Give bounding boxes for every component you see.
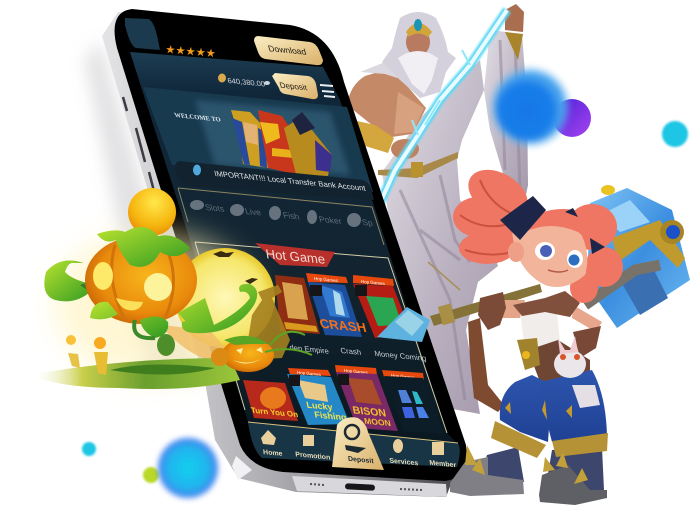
rabbit pouch [554,336,586,378]
zeus crown gem [414,19,422,31]
category panel [178,188,384,245]
small pumpkin leaves [224,336,268,345]
game tile: turn your cat [243,380,299,421]
phone side buttons [123,97,155,195]
balance coin [218,74,226,82]
zeus chest shading [394,92,424,134]
balance amount: 640,380.00 [227,76,266,89]
game tile: money coming [353,275,412,338]
girl right boot shin [545,448,604,492]
girl left glove [478,292,506,330]
game tile: lucky fishing: Lucky [305,400,334,412]
decorative blue orb [490,67,570,147]
girl white top [520,312,560,350]
anubis figure [284,118,332,176]
lightning bolt [380,10,507,203]
category tabs: Sp [361,217,374,228]
zeus sleeve drape [484,30,528,205]
left tail leaf [44,260,95,301]
pumpkin body [85,236,197,324]
small pumpkin [222,338,274,372]
zeus robe hem gold [428,262,460,290]
zeus hand [391,139,419,159]
hot game badge: Hot Game [265,246,326,267]
pant studs [505,400,572,420]
nav labels: Member [429,460,457,469]
pumpkin crease [112,245,174,320]
girl head [500,196,605,287]
nav labels: Home [263,449,283,458]
left eye [535,242,555,260]
grass shadow [110,364,215,375]
promo banner [143,87,373,192]
vine bulb [157,334,175,356]
right boot [539,465,607,505]
mouth [548,270,568,272]
decorative green orb [143,467,159,483]
girl left boot shin [480,447,524,482]
tail stem [80,278,100,296]
right curl leaf [178,284,257,333]
falcon figure [258,110,298,175]
phone bottom edge details [232,456,447,497]
balance eye icon [264,81,270,85]
nav labels [263,449,457,469]
pumpkin leaves [97,227,190,267]
zeus main robe [382,60,498,414]
banner backdrop glow [195,100,350,175]
ear [508,242,524,262]
zeus raised hand [505,4,524,32]
ground [30,358,240,389]
bows [500,196,605,254]
game tile: bison moon: MOON [363,416,392,428]
small pumpkin face [233,347,263,364]
game tile: turn your cat: Turn You On [250,406,299,419]
zeus moustache and beard [398,51,438,94]
yellow ball [128,188,176,236]
hanging vine [134,320,155,338]
moon [175,248,275,348]
zeus character [347,4,528,414]
zeus torso [347,70,426,137]
rabbit charm [572,385,600,408]
category tabs: Slots [204,202,226,214]
phone silver body [102,12,464,497]
small pumpkin side [211,348,229,366]
halloween pumpkin scene [30,188,312,389]
bottom nav bar [248,417,460,470]
right boot spikes [543,452,588,484]
category tabs: Fish [282,210,301,221]
game names row [289,343,427,363]
game tile: crash: CRASH [318,316,368,335]
zeus shoulder robe [360,60,410,82]
pumpkin mouth [116,298,143,310]
game tile: money coming dark [382,370,444,434]
hammer head [587,188,690,328]
game names row: Crash [340,346,362,357]
speaker icon [193,164,201,176]
game tile: bison moon: BISON [352,405,387,420]
menu icon [320,85,335,97]
category tabs [190,200,374,228]
orange sky tint [160,325,235,362]
category tabs: Poker [318,214,343,226]
game tile: money coming: Hop Games [361,279,386,286]
zeus belt buckle [411,162,423,177]
game tile: bison moon [335,365,398,431]
girl hair back curls [453,160,623,303]
girl right pant leg [540,370,607,442]
deposit button [272,73,318,99]
nav labels: Services [389,458,419,467]
nav labels: Promotion [295,451,331,462]
game tile: money coming dark: Hop Games [391,373,416,380]
decorative cyan orb right [662,121,688,147]
hammer gold band [612,220,685,268]
promotion icon [303,435,314,446]
lower leaves [90,302,168,338]
decorative cyan orb small [82,442,96,456]
game tile: crash: Hop Games [314,276,339,283]
notice text: IMPORTANT!!! Local Transfer Bank Account [213,169,367,193]
category tabs: Live [244,206,262,217]
girl hammer [585,185,690,328]
pumpkin left eye [93,262,113,290]
phone screen [130,52,458,467]
deposit icon [345,425,366,453]
services icon [393,439,403,453]
top hair [520,209,594,242]
deposit button: Deposit [278,81,309,92]
zeus gold bracer [354,121,394,153]
deposit tab [332,417,384,470]
nav labels: Deposit [348,456,375,465]
game names row: Money Coming [374,349,427,363]
member icon [432,442,444,455]
girl leather shoulder [513,291,580,317]
girl body [450,291,608,505]
home icon [261,430,276,445]
decorative orb bottom [158,438,218,498]
girl belt and pouch [528,340,590,382]
rating stars: ★★★★★ [165,44,216,60]
game tile: golden empire [275,275,320,334]
zeus belt [378,152,458,178]
right cuff gold [552,433,608,457]
left boot spikes [465,445,485,475]
zeus robe folds [400,40,520,400]
pharaoh figure [231,110,268,168]
left cuff gold [491,421,546,458]
face [512,220,587,287]
crystal tip [377,307,430,342]
charging port [345,483,375,491]
decorative purple orb [553,99,591,137]
right eye [567,250,583,268]
game names row: den Empire [289,343,330,356]
game tile: lucky fishing: Fishing [313,410,347,422]
download button: Download [267,43,308,57]
hammer silver arc [585,265,660,305]
hair curl shading [460,180,515,255]
zeus hair [382,12,456,98]
tombstone [246,285,290,360]
hammer facets [620,262,668,315]
bats [213,251,258,284]
zeus gold cuff [505,32,523,60]
girl left pant leg [500,375,552,442]
girl staff [377,284,542,342]
pumpkin right eye [144,273,172,301]
hot game panel outline [195,242,447,433]
blue tile icon [398,390,429,418]
candles [66,335,108,375]
zeus crown [406,23,432,37]
game tile: lucky fishing [287,368,350,425]
notice bar [175,161,374,200]
soft shadow beside phone [85,40,200,380]
top notch tile [125,18,160,50]
zeus face [406,28,430,56]
welcome text: WELCOME TO [174,112,222,124]
zeus leg and sandal [468,318,504,412]
hammer gem [660,220,684,244]
left boot [450,457,524,496]
game tile: bison moon: Hop Games [344,368,369,375]
warm glow [55,230,255,380]
girl forearm [498,300,525,318]
girl hip arm [572,305,602,332]
game tile: lucky fishing: Hop Games [297,370,322,377]
hammer nub [601,185,615,195]
game tile: crash [306,273,368,337]
download button [254,36,323,65]
hot game badge [255,243,335,267]
grass blades [265,332,312,355]
phone black bezel [115,9,467,481]
